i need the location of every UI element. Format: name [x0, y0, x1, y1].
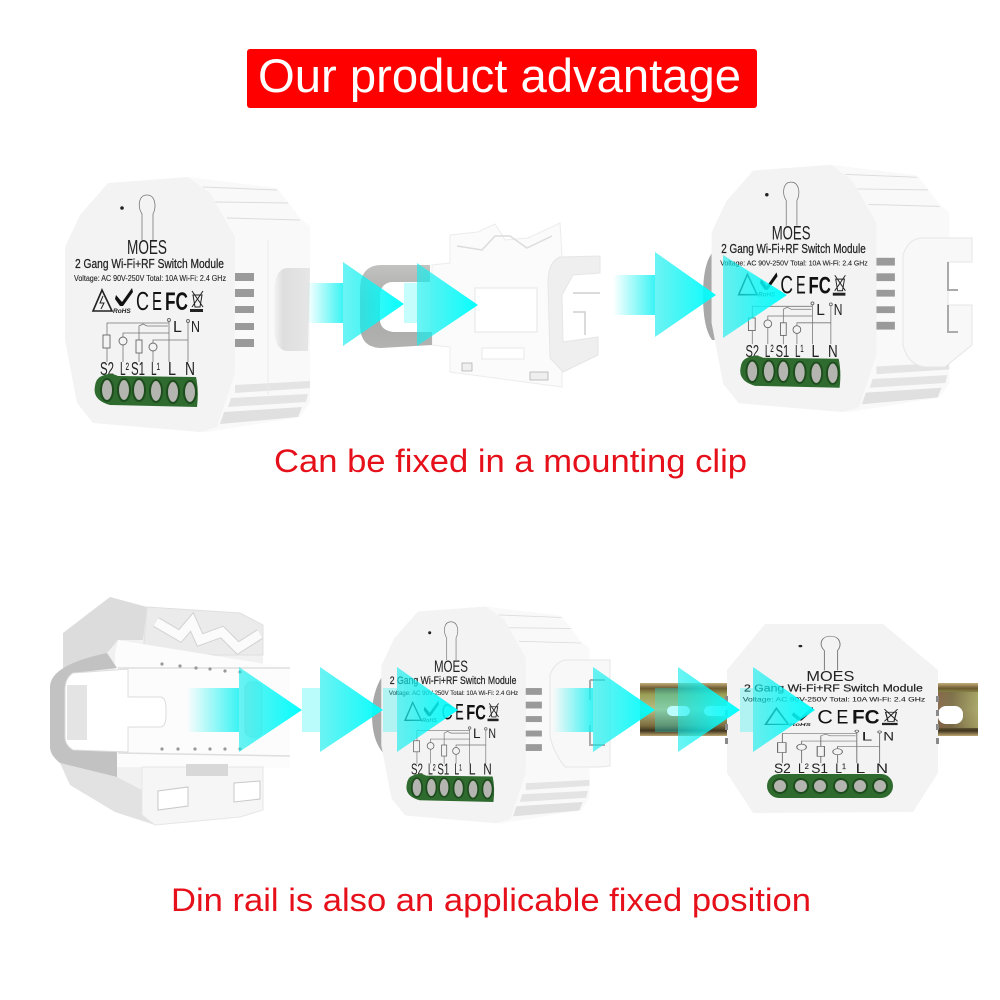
tab behind module 3	[372, 672, 395, 755]
module 4 face print: L²	[798, 761, 809, 776]
module 1 face: S1	[131, 359, 145, 379]
module 3 face: MOES	[434, 657, 468, 676]
module 2 face: S2	[745, 341, 759, 361]
module 2 face: E	[796, 272, 806, 300]
module 2 face: N	[834, 302, 843, 319]
module 2 face	[712, 165, 876, 412]
module 2 face: L¹	[795, 341, 804, 361]
module 1 face: L	[173, 319, 182, 336]
din rail	[640, 683, 978, 736]
module 4 face print: L	[856, 761, 865, 776]
module 1 face: E	[152, 286, 162, 316]
module 3 face: C	[442, 700, 453, 724]
module 2 face: S1	[776, 341, 789, 361]
clip on module 2	[903, 238, 972, 367]
clip on module 3	[550, 660, 610, 767]
module 2 face: L	[816, 302, 825, 319]
module 3: switch module with din clip	[372, 606, 610, 823]
module 2 face: L²	[765, 341, 774, 361]
module 4 face print: C	[817, 705, 833, 728]
arrow: module 1 to clip	[307, 262, 478, 346]
module 3 face: FC	[466, 700, 486, 724]
module 3 face: N	[488, 726, 496, 741]
module 3 face: S2	[411, 762, 423, 779]
module 4 face print: FC	[852, 707, 880, 728]
module 1 face: Voltage: AC 90V-250V Total: 10A Wi-Fi: 2.4 GHz	[74, 274, 226, 283]
module 3 face: Voltage: AC 90V-250V Total: 10A Wi-Fi: 2.4 GHz	[389, 690, 519, 697]
module 1: switch module before clip	[65, 177, 310, 432]
module 4 face print: MOES	[806, 668, 854, 685]
arrow: din clip to module 3	[187, 667, 458, 752]
module 4 face print: L¹	[835, 761, 846, 776]
module 1 face: FC	[165, 288, 188, 316]
module 1 face: L¹	[151, 359, 160, 379]
module 2: switch module in clip	[703, 165, 972, 412]
module 3 face: E	[455, 700, 464, 724]
module 1 face: L	[168, 359, 176, 379]
module 4 face print: 2 Gang Wi-Fi+RF Switch Module	[744, 683, 923, 694]
module 2 body	[831, 165, 949, 412]
module 3 face: N	[483, 762, 492, 779]
module 2 face: 2 Gang Wi-Fi+RF Switch Module	[721, 242, 866, 256]
module 3 face: L	[473, 726, 481, 741]
module 1 face: N	[185, 359, 195, 379]
module 4 face print: Voltage: AC 90V-250V Total: 10A Wi-Fi: 2.4 GHz	[743, 696, 925, 703]
module 1 body	[188, 177, 310, 432]
module 4 face print: L	[862, 730, 872, 743]
module 4 face print: RoHS	[790, 722, 812, 727]
module 4 face outline	[727, 624, 938, 813]
module 2 face: FC	[809, 273, 831, 300]
mounting clip	[360, 223, 600, 387]
module 3 face: RoHS	[422, 718, 437, 724]
module 1 face: C	[136, 286, 149, 316]
module 4 face print	[743, 636, 925, 776]
module 2 face: MOES	[772, 222, 811, 244]
module 2 face: L	[811, 341, 819, 361]
module 4 face print: N	[883, 730, 894, 743]
module 3 face: S1	[437, 762, 449, 779]
title banner: Our product advantage	[258, 49, 741, 102]
module 1 face	[65, 177, 235, 432]
module 3 face: L¹	[454, 762, 462, 779]
module 4 face print: S2	[774, 761, 791, 776]
module 1 face: N	[191, 319, 200, 336]
arrow: clip to module 2	[613, 252, 787, 338]
module 1 face: RoHS	[113, 308, 131, 315]
module 4 terminal block	[767, 774, 893, 798]
module 1 face: 2 Gang Wi-Fi+RF Switch Module	[75, 256, 224, 271]
module 3 body	[486, 606, 590, 823]
module 2 face: RoHS	[758, 292, 776, 299]
module 4 face print: E	[836, 705, 848, 728]
din rail clip assembly	[50, 597, 290, 825]
module 1 face: L²	[120, 359, 129, 379]
module 4: switch module on din rail	[725, 624, 939, 813]
module 2 face: N	[828, 341, 838, 361]
module 4 face print: N	[876, 761, 888, 776]
module 4 face print: S1	[811, 761, 828, 776]
module 1 face: MOES	[127, 237, 167, 259]
tab behind module 2	[703, 253, 722, 340]
arrow: module 3 to din rail	[553, 667, 815, 752]
module 3 face: 2 Gang Wi-Fi+RF Switch Module	[390, 675, 516, 687]
module 2 face: C	[780, 272, 793, 300]
module 1 face: S2	[100, 359, 114, 379]
module 3 face	[381, 606, 526, 823]
module 3 face: L	[469, 762, 476, 779]
module 3 face: L²	[428, 762, 436, 779]
caption: mounting clip: Can be fixed in a mounting clip	[274, 443, 747, 479]
caption: din rail: Din rail is also an applicable fixed position	[171, 882, 811, 918]
module 4 side vents	[725, 696, 939, 744]
module 2 face: Voltage: AC 90V-250V Total: 10A Wi-Fi: 2.4 GHz	[720, 259, 868, 268]
